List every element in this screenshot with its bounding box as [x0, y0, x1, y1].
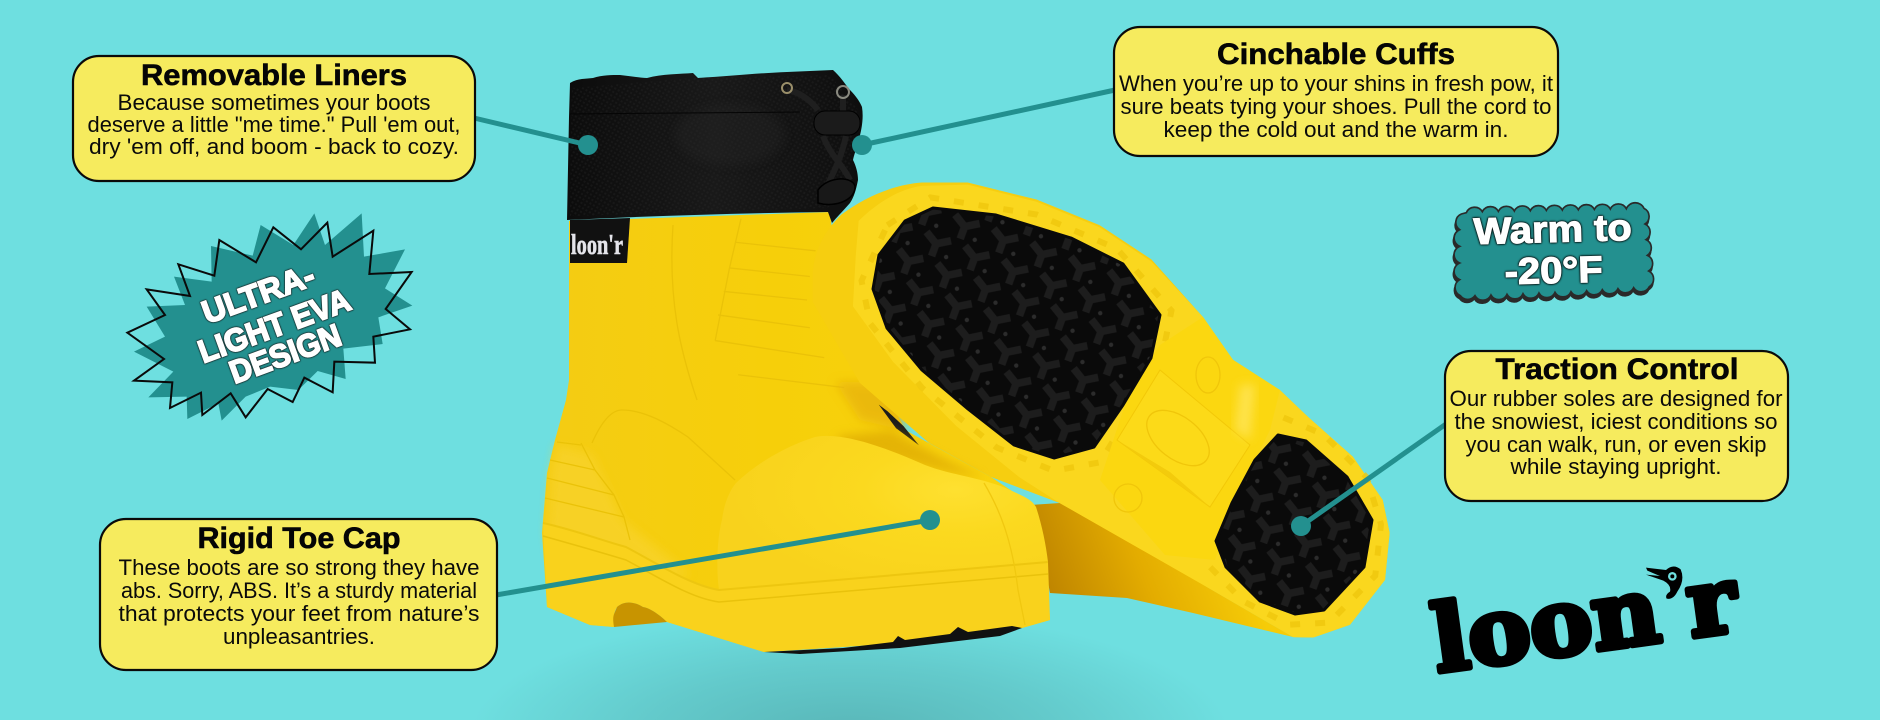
- starburst badge: ultra-light EVA design: ULTRA-: [197, 257, 319, 331]
- heel tread: [1216, 435, 1372, 614]
- icon: loon bird apostrophe: [1646, 566, 1682, 599]
- body text: sure beats tying your shoes. Pull the cord to: [1120, 94, 1552, 119]
- boot tag: loon'r: [571, 229, 623, 261]
- connector: liners: [474, 118, 598, 155]
- body text: while staying upright.: [1509, 454, 1722, 479]
- heading: Cinchable Cuffs: [1217, 38, 1455, 71]
- body text: deserve a little "me time." Pull 'em out,: [88, 112, 460, 137]
- body text: Our rubber soles are designed for: [1450, 386, 1783, 411]
- body text: keep the cold out and the warm in.: [1164, 117, 1508, 142]
- cuff: [567, 70, 863, 223]
- connector: traction: [1291, 424, 1446, 536]
- body text: unpleasantries.: [223, 624, 375, 649]
- body text: When you’re up to your shins in fresh pow, it: [1119, 71, 1554, 96]
- boot tag: [570, 218, 630, 263]
- heading: Rigid Toe Cap: [198, 522, 400, 555]
- body text: you can walk, run, or even skip: [1466, 432, 1766, 457]
- body text: that protects your feet from nature’s: [118, 601, 480, 626]
- body text: [1450, 386, 1783, 479]
- scalloped badge: warm to -20F: [1453, 203, 1654, 303]
- heading: Removable Liners: [141, 59, 407, 92]
- arch plate: [1100, 317, 1280, 560]
- leaning boot side wall: [1030, 503, 1293, 637]
- body text: [88, 90, 460, 159]
- heading: Traction Control: [1496, 353, 1738, 386]
- starburst badge: ultra-light EVA design: DESIGN: [225, 317, 346, 390]
- body text: [118, 555, 480, 649]
- connector: toe cap: [496, 510, 940, 595]
- callout: Removable Liners: [73, 56, 475, 181]
- body text: These boots are so strong they have: [118, 555, 480, 580]
- callout: Rigid Toe Cap: [100, 519, 497, 670]
- forefoot tread: [873, 208, 1160, 458]
- connector: cuffs: [852, 90, 1115, 155]
- body text: [1119, 71, 1554, 142]
- starburst badge: ultra-light EVA design: LIGHT EVA: [193, 282, 355, 370]
- standing boot: [542, 212, 1050, 652]
- boots photo: [542, 70, 1390, 654]
- callout: Traction Control: [1445, 351, 1788, 501]
- logo: loon'r: loon'r: [1425, 545, 1745, 694]
- toe cap: [543, 430, 1050, 654]
- body text: Because sometimes your boots: [118, 90, 430, 115]
- body text: the snowiest, iciest conditions so: [1454, 409, 1778, 434]
- body text: abs. Sorry, ABS. It’s a sturdy material: [121, 578, 477, 603]
- leaning boot sole: [813, 182, 1390, 638]
- callout: Cinchable Cuffs: [1114, 27, 1558, 156]
- scalloped badge: warm to -20F: -20°F: [1504, 249, 1603, 292]
- starburst badge: ultra-light EVA design: [127, 213, 412, 421]
- body text: dry 'em off, and boom - back to cozy.: [89, 134, 459, 159]
- floor shadow: [400, 560, 1300, 720]
- scalloped badge: warm to -20F: Warm to: [1473, 207, 1632, 252]
